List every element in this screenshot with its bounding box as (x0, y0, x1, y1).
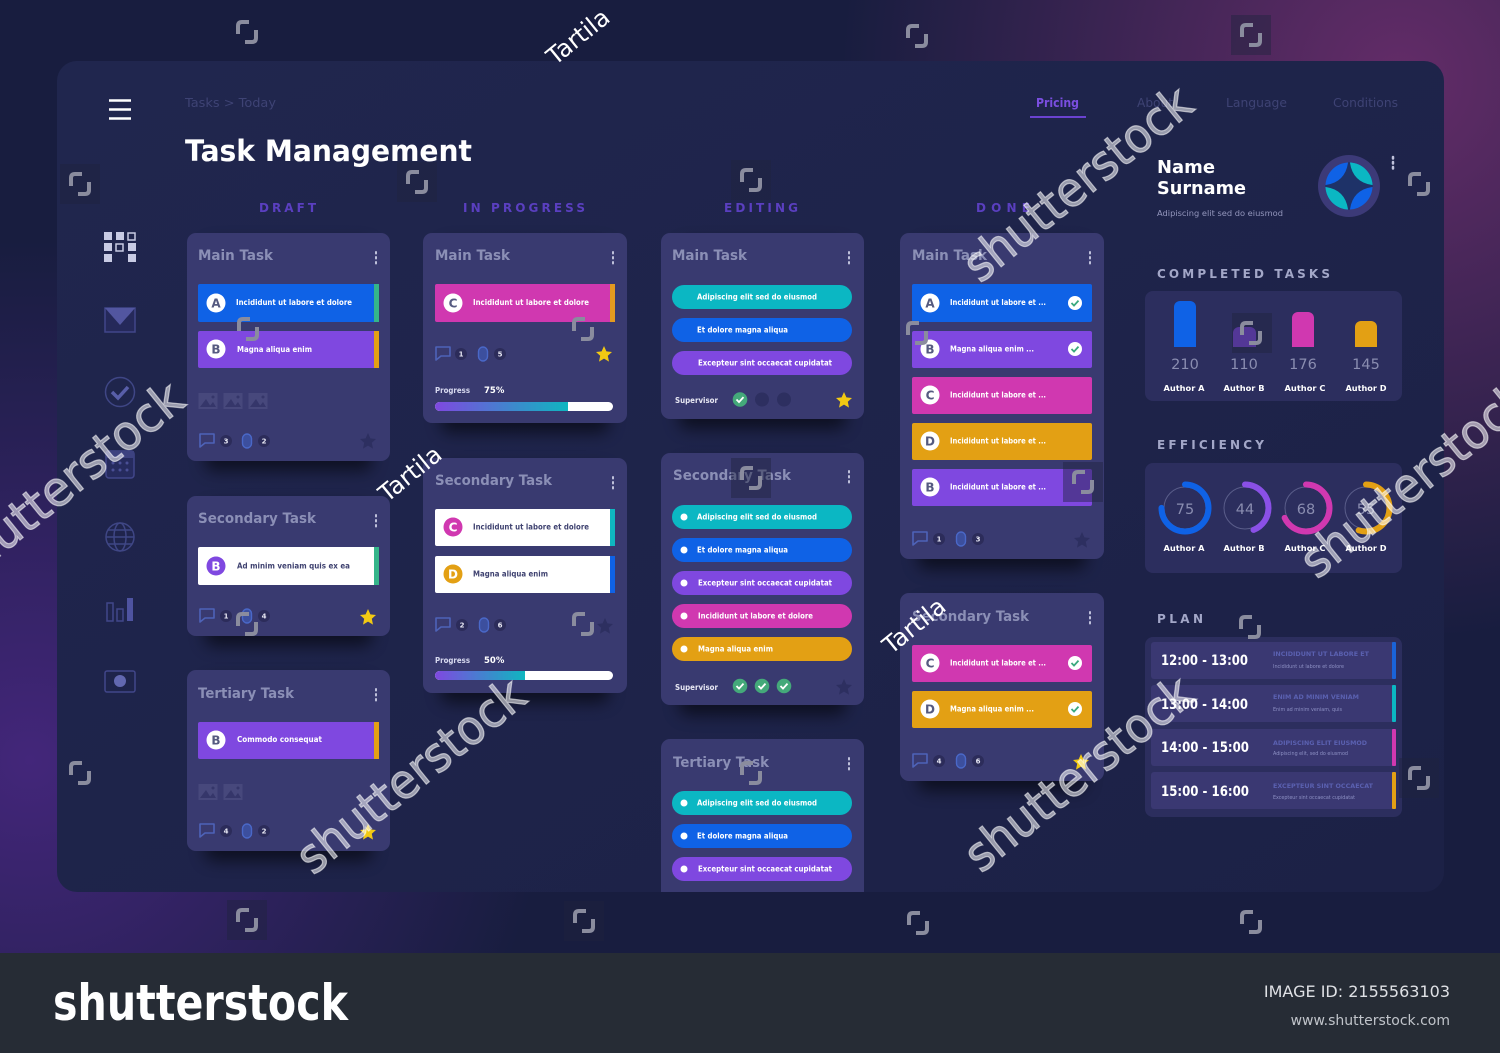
top navigation: Language (1226, 96, 1287, 110)
task rows: Incididunt ut labore et ... (950, 298, 1046, 307)
panel: editing tertiary task (661, 739, 864, 892)
plan row 12:00: INCIDIDUNT UT LABORE ET (1273, 650, 1370, 658)
profile: Adipiscing elit sed do eiusmod (1157, 209, 1283, 218)
plan row 14:00: ADIPISCING ELIT EIUSMOD (1273, 739, 1368, 747)
bar chart: 176 (1289, 357, 1317, 373)
task row B: B (211, 560, 221, 574)
panel: efficiency: 44 (1236, 502, 1254, 518)
counts (436, 618, 506, 632)
icon: star (1073, 754, 1089, 770)
task row C (435, 509, 615, 546)
task row D: D (448, 568, 458, 582)
profile: Surname (1157, 178, 1246, 199)
bar chart: Author B (1224, 384, 1264, 393)
counts: 3 (976, 536, 981, 544)
column headings: DONE (976, 201, 1030, 215)
panel: efficiency: 55 (1357, 502, 1375, 518)
panel: editing secondary task (661, 453, 864, 705)
panel: editing tertiary task: Tertiary Task (673, 755, 769, 771)
task row B: B (211, 342, 221, 356)
task rows: Incididunt ut labore et ... (950, 390, 1046, 400)
counts (200, 609, 270, 623)
column headings: IN PROGRESS (463, 201, 585, 215)
progress bar (435, 386, 613, 411)
panel: editing main task (661, 233, 864, 419)
icon: screen (105, 671, 135, 692)
task pills: Incididunt ut labore et dolore (698, 612, 813, 620)
task rows: Incididunt ut labore et ... (950, 658, 1046, 668)
counts: 6 (976, 758, 981, 766)
counts: 1 (224, 612, 229, 620)
task rows: B (925, 480, 935, 494)
panel: efficiency: 75 (1176, 502, 1194, 518)
breadcrumb: Tasks > Today (184, 96, 276, 110)
plan row 14:00 (1151, 729, 1396, 766)
bar chart: Author C (1284, 384, 1326, 393)
counts (913, 754, 984, 768)
counts: 1 (937, 536, 942, 544)
watermark: shutterstock text: shutterstock (953, 665, 1205, 883)
task row B: Ad minim veniam quis ex ea (237, 562, 350, 570)
counts: 2 (262, 828, 267, 836)
task pills: Excepteur sint occaecat cupidatat (698, 864, 832, 874)
panel: draft tertiary task: Tertiary Task (198, 686, 294, 702)
panel: editing main task: Main Task (672, 248, 747, 264)
bar chart: 110 (1230, 357, 1258, 373)
panel: draft main task (187, 233, 390, 461)
panel: draft tertiary task (187, 670, 390, 851)
task rows: Incididunt ut labore et ... (950, 436, 1046, 446)
task row A: A (211, 296, 221, 310)
task rows: A (925, 296, 935, 310)
bar chart: 145 (1352, 357, 1380, 373)
avatar (1318, 155, 1380, 217)
panel: editing secondary task: Secondary Task (673, 468, 791, 484)
panel: done main task (900, 233, 1104, 559)
counts (200, 824, 270, 838)
task row D: Magna aliqua enim (473, 570, 548, 578)
supervisor row: Supervisor (675, 396, 718, 405)
watermark: Tartila text: Tartila (372, 440, 447, 508)
plan row 14:00: 14:00 - 15:00 (1161, 740, 1249, 756)
column headings (259, 201, 1030, 215)
comment and attachment counts (200, 434, 270, 448)
plan row 15:00 (1151, 772, 1396, 809)
icon: apps grid (104, 232, 136, 262)
panel: done secondary task (900, 593, 1104, 781)
icon: menu (109, 100, 131, 118)
panel: efficiency: Author D (1346, 544, 1387, 553)
plan row 13:00 (1151, 685, 1396, 722)
plan row 13:00: 13:00 - 14:00 (1161, 697, 1248, 713)
task rows: Incididunt ut labore et ... (950, 482, 1046, 492)
supervisor row: Supervisor (675, 683, 718, 692)
task pills: Excepteur sint occaecat cupidatat (698, 358, 832, 368)
panel: completed tasks (1145, 267, 1402, 401)
icon: star (1074, 532, 1090, 548)
top navigation: Pricing (1036, 96, 1079, 110)
plan row 15:00: Excepteur sint occaecat cupidatat (1273, 795, 1356, 801)
task pills: Magna aliqua enim (698, 644, 773, 654)
progress bar: Progress (435, 656, 470, 665)
bar chart: 210 (1171, 357, 1199, 373)
bar chart: Author A (1164, 384, 1205, 393)
plan row 15:00: 15:00 - 16:00 (1161, 784, 1249, 800)
column headings: EDITING (724, 201, 798, 215)
ring charts (1162, 484, 1390, 532)
task row A (198, 284, 379, 322)
icon: star (360, 609, 376, 625)
plan row 12:00: 12:00 - 13:00 (1161, 653, 1248, 669)
counts (436, 347, 506, 361)
counts: 1 (459, 350, 464, 358)
task pills: Et dolore magna aliqua (697, 832, 788, 840)
counts: 6 (498, 622, 503, 630)
counts: 2 (460, 622, 465, 630)
progress bar: Progress (435, 386, 470, 395)
task pills: Adipiscing elit sed do eiusmod (697, 798, 817, 808)
task pills (672, 505, 852, 661)
task row B: Magna aliqua enim (237, 345, 312, 354)
panel: plan (1145, 612, 1402, 817)
task row B: Commodo consequat (237, 735, 322, 744)
task rows: Magna aliqua enim ... (950, 344, 1034, 354)
plan row 12:00: Incididunt ut labore et dolore (1273, 664, 1345, 670)
panel: draft secondary task: Secondary Task (198, 511, 316, 527)
watermark: Tartila text: Tartila (876, 592, 951, 660)
sidebar icons (104, 100, 136, 692)
icon: star (360, 433, 376, 449)
task row C (435, 284, 615, 322)
icon: star (836, 392, 852, 408)
panel: in progress secondary task: Secondary Task (435, 473, 552, 489)
footer logo: shutterstock (53, 974, 349, 1032)
icon: calendar (106, 451, 134, 478)
panel: plan: PLAN (1157, 612, 1203, 626)
panel: efficiency: EFFICIENCY (1157, 438, 1264, 452)
panel: efficiency: Author C (1284, 544, 1326, 553)
icon: bar chart (107, 598, 133, 621)
task pills: Et dolore magna aliqua (697, 326, 788, 334)
dashboard panel (57, 61, 1444, 892)
top navigation: Conditions (1333, 96, 1398, 110)
task rows: B (925, 342, 935, 356)
task rows (912, 645, 1092, 728)
task pills: Et dolore magna aliqua (697, 546, 788, 554)
panel: in progress main task (423, 233, 627, 423)
counts: 4 (224, 828, 229, 836)
supervisor row (675, 679, 791, 693)
panel: efficiency (1145, 438, 1402, 573)
panel: completed tasks: COMPLETED TASKS (1157, 267, 1330, 281)
icon: star (596, 346, 612, 362)
task pills: Adipiscing elit sed do eiusmod (697, 512, 817, 522)
icon: star (597, 618, 613, 634)
progress bar (435, 656, 613, 680)
column headings: DRAFT (259, 201, 317, 215)
task rows: Magna aliqua enim ... (950, 704, 1034, 714)
task rows: C (926, 388, 935, 402)
task rows (912, 284, 1092, 506)
plan row 14:00: Adipiscing elit, sed do eiusmod (1273, 751, 1348, 757)
task row B (198, 547, 379, 585)
icon: check circle (106, 378, 134, 406)
panel: in progress secondary task (423, 458, 627, 693)
progress bar: 75% (484, 386, 505, 396)
panel: efficiency: 68 (1297, 502, 1315, 518)
image placeholders (198, 784, 242, 800)
task rows: D (925, 702, 935, 716)
icon: star (836, 679, 852, 695)
panel: in progress main task: Main Task (435, 248, 510, 264)
footer bar (0, 953, 1500, 1053)
bar chart (1164, 301, 1387, 393)
task rows: C (926, 656, 935, 670)
plan row 13:00: ENIM AD MINIM VENIAM (1273, 693, 1359, 701)
top navigation: About (1137, 96, 1173, 110)
task row C: Incididunt ut labore et dolore (473, 522, 589, 532)
comment and attachment counts: 3 (224, 438, 229, 446)
task rows: D (925, 434, 935, 448)
panel: done main task: Main Task (912, 248, 987, 264)
counts: 4 (937, 758, 942, 766)
task row C: Incididunt ut labore et dolore (473, 298, 589, 307)
footer url: www.shutterstock.com (1291, 1013, 1450, 1029)
panel: done secondary task: Secondary Task (912, 609, 1029, 625)
title: Task Management (185, 134, 472, 168)
task row B (198, 722, 379, 759)
profile: Name (1157, 157, 1215, 178)
top navigation (1030, 96, 1398, 118)
task pills (672, 285, 852, 375)
task row C: C (449, 296, 458, 310)
plan row 15:00: EXCEPTEUR SINT OCCAECAT (1273, 782, 1374, 790)
panel: efficiency: Author B (1224, 544, 1264, 553)
watermark: Tartila text: Tartila (540, 3, 615, 71)
plan row 13:00: Enim ad minim veniam, quis (1273, 707, 1342, 713)
task pills: Adipiscing elit sed do eiusmod (697, 292, 817, 302)
task row C: C (449, 520, 458, 534)
image placeholders (198, 393, 268, 409)
task pills: Excepteur sint occaecat cupidatat (698, 578, 832, 588)
task row B (198, 331, 379, 368)
watermark: shutterstock text: shutterstock (952, 75, 1204, 293)
panel: draft main task: Main Task (198, 248, 273, 264)
task row D (435, 556, 615, 593)
panel: efficiency: Author A (1164, 544, 1205, 553)
bar chart: Author D (1346, 384, 1387, 393)
task row A: Incididunt ut labore et dolore (236, 298, 352, 307)
image id: IMAGE ID: 2155563103 (1264, 982, 1450, 1001)
comment and attachment counts: 2 (262, 438, 267, 446)
icon: envelope (105, 308, 135, 332)
task pills (672, 791, 852, 881)
counts: 5 (498, 350, 503, 358)
watermark: shutterstock text: shutterstock (285, 667, 537, 885)
counts: 4 (262, 612, 267, 620)
counts (913, 532, 984, 546)
panel: draft secondary task (187, 496, 390, 636)
task row B: B (211, 734, 221, 748)
watermark: Tartila text (372, 3, 951, 660)
icon: globe (106, 523, 134, 551)
profile (1157, 155, 1393, 218)
icon: star (360, 824, 376, 840)
supervisor row (675, 392, 791, 407)
plan row 12:00 (1151, 642, 1396, 679)
progress bar: 50% (484, 656, 505, 666)
